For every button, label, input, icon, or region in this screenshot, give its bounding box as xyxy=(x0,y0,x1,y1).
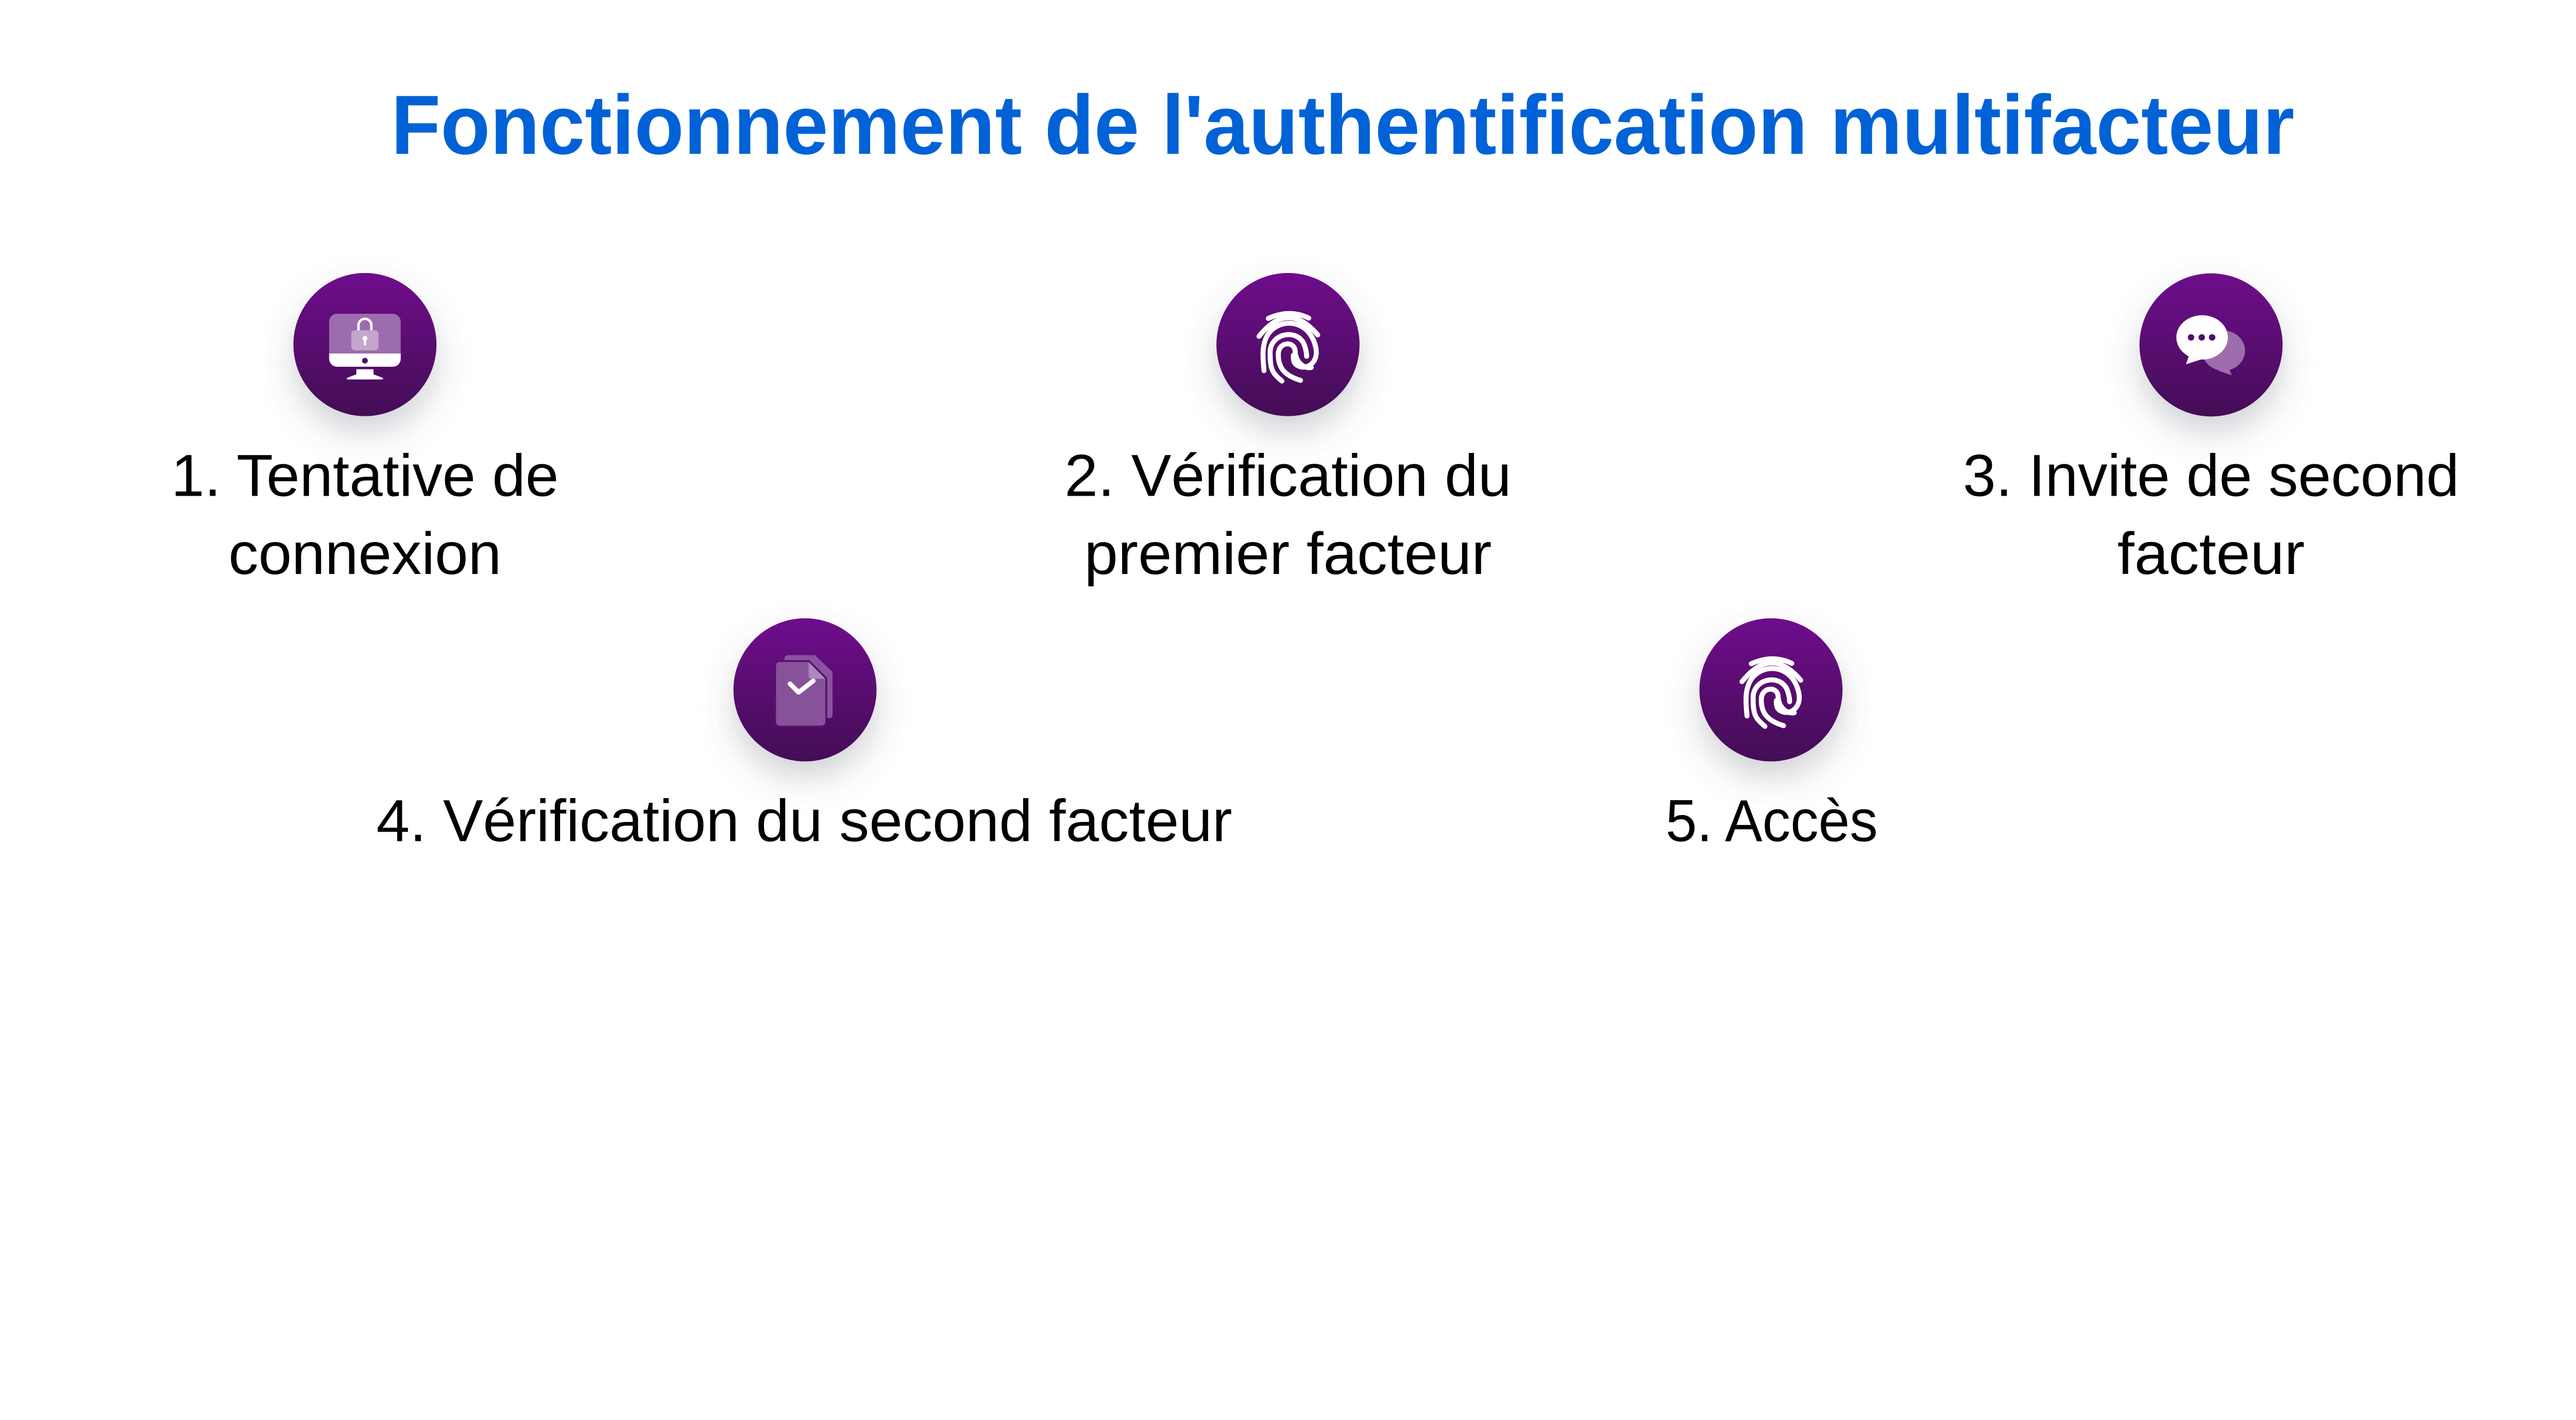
icon: fingerprint xyxy=(1700,618,1842,762)
icon: chat bubbles xyxy=(2140,274,2283,416)
title: Fonctionnement de l'authentification multifacteur xyxy=(391,78,2294,172)
icon: documents with check xyxy=(734,618,876,762)
label 3: 3. Invite de second xyxy=(1963,443,2459,509)
step 5: accès xyxy=(1666,618,1878,854)
label 5: 5. Accès xyxy=(1666,788,1878,854)
label 4: 4. Vérification du second facteur xyxy=(377,788,1232,854)
label 2: premier facteur xyxy=(1084,521,1492,587)
label 2: 2. Vérification du xyxy=(1064,443,1512,509)
step 3: invite de second facteur xyxy=(1963,274,2459,587)
icon: monitor with lock xyxy=(293,273,436,416)
label 3: facteur xyxy=(2117,521,2305,587)
icon: fingerprint xyxy=(1216,273,1360,416)
step 2: vérification du premier facteur xyxy=(1064,273,1512,587)
step 1: tentative de connexion xyxy=(171,273,558,587)
step 4: vérification du second facteur xyxy=(377,618,1232,854)
label 1: 1. Tentative de xyxy=(171,443,558,509)
label 1: connexion xyxy=(228,521,501,587)
